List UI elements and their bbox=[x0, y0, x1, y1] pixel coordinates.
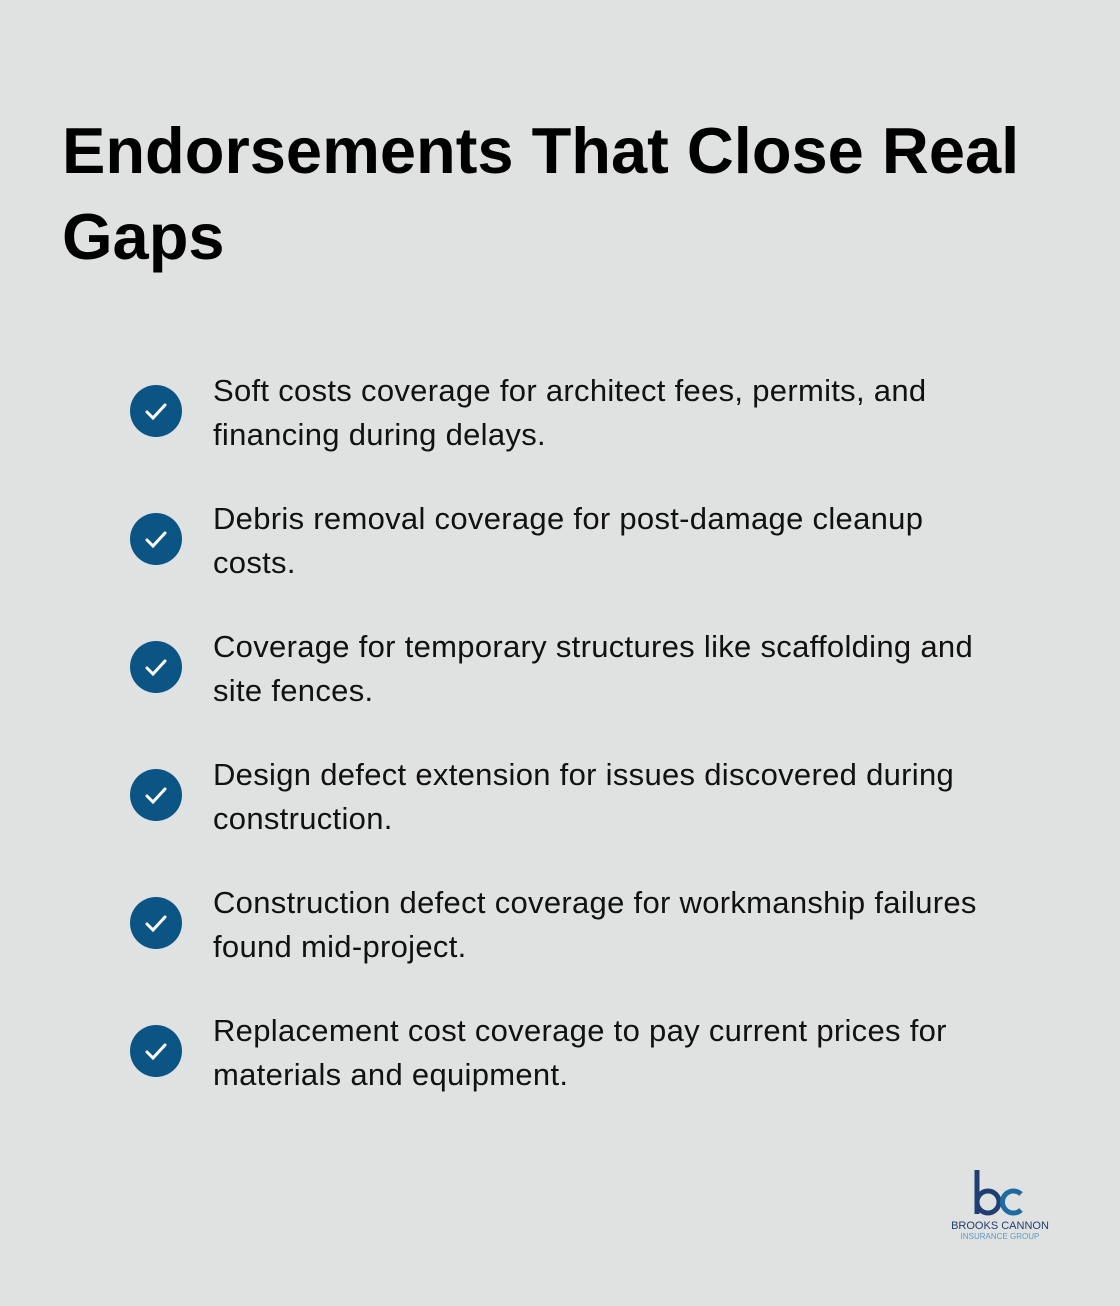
item: soft costs: Soft costs coverage for architect fees, permits, and financing during delays. bbox=[213, 373, 926, 452]
logo bbox=[951, 1170, 1049, 1241]
title: Endorsements That Close Real Gaps bbox=[62, 114, 1019, 273]
item: construction defect: Construction defect coverage for workmanship failures found mid-project. bbox=[213, 885, 977, 964]
icon: check bbox=[130, 897, 182, 949]
logo: BROOKS CANNON bbox=[951, 1220, 1049, 1232]
icon: check bbox=[130, 513, 182, 565]
item: design defect: Design defect extension for issues discovered during construction. bbox=[213, 757, 954, 836]
logo: INSURANCE GROUP bbox=[961, 1232, 1039, 1241]
item: debris: Debris removal coverage for post-damage cleanup costs. bbox=[213, 501, 923, 580]
icon: check bbox=[130, 1025, 182, 1077]
icon: check bbox=[130, 769, 182, 821]
icon: check bbox=[130, 385, 182, 437]
item: replacement cost: Replacement cost coverage to pay current prices for materials and equipment. bbox=[213, 1013, 947, 1092]
icon: check bbox=[130, 641, 182, 693]
item: temporary structures: Coverage for temporary structures like scaffolding and site fences. bbox=[213, 629, 973, 708]
